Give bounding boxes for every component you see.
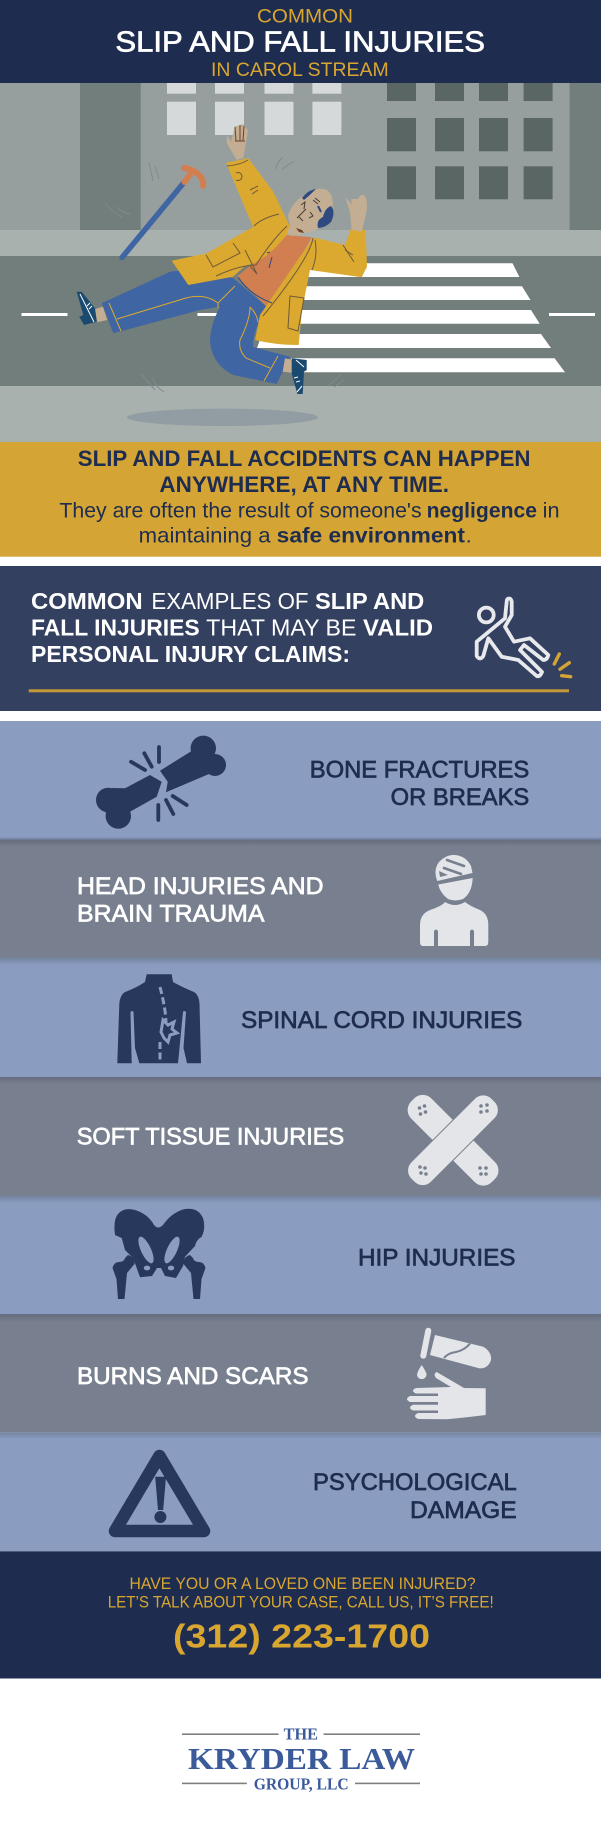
trouser seams <box>109 286 278 381</box>
band body text: in <box>543 499 560 522</box>
road and sidewalks <box>0 230 601 442</box>
shoe laces <box>80 294 304 392</box>
gold message band <box>0 442 601 557</box>
buildings background <box>0 83 601 230</box>
band heading: SLIP AND FALL ACCIDENTS CAN HAPPEN <box>78 446 531 471</box>
icon: head bandage <box>420 855 488 946</box>
label: BRAIN TRAUMA <box>77 901 264 928</box>
law firm logo: KRYDER LAW <box>188 1741 415 1776</box>
band body text: safe environment <box>277 524 465 547</box>
call to action footer <box>0 1551 601 1678</box>
row: bone fractures <box>0 721 601 840</box>
label: HIP INJURIES <box>358 1245 516 1272</box>
label: PSYCHOLOGICAL <box>313 1469 517 1496</box>
panel heading <box>31 588 433 667</box>
header kicker: COMMON <box>257 6 353 28</box>
raised hand <box>227 124 248 160</box>
label: SOFT TISSUE INJURIES <box>77 1124 344 1151</box>
gold rule <box>29 689 569 692</box>
icon: chemical burn <box>407 1331 491 1419</box>
street scene illustration <box>0 83 601 442</box>
main title: SLIP AND FALL INJURIES <box>115 27 485 59</box>
panel heading: PERSONAL INJURY CLAIMS: <box>31 641 350 667</box>
row: head injuries <box>0 840 601 958</box>
panel heading: VALID <box>363 615 433 641</box>
panel heading: COMMON <box>31 588 143 614</box>
jacket seams <box>206 160 354 331</box>
ground shadow <box>127 409 318 426</box>
header location: IN CAROL STREAM <box>211 59 389 81</box>
label: HEAD INJURIES AND <box>77 873 324 900</box>
icon: broken bone <box>96 736 226 829</box>
row: soft tissue injuries <box>0 1077 601 1196</box>
icon: spine torso <box>117 974 201 1063</box>
band body text: . <box>466 524 472 547</box>
band heading <box>78 446 531 497</box>
face lines <box>297 198 321 221</box>
call to action text: HAVE YOU OR A LOVED ONE BEEN INJURED? <box>130 1574 476 1593</box>
panel heading: FALL INJURIES <box>31 615 200 641</box>
band body text <box>59 499 560 547</box>
shoes <box>77 292 97 325</box>
label: BONE FRACTURES <box>310 757 529 784</box>
lane dashes <box>22 313 595 316</box>
row: burns and scars <box>0 1314 601 1432</box>
panel heading: THAT MAY BE <box>206 615 356 641</box>
band body text: maintaining a <box>139 524 271 547</box>
motion lines <box>105 157 344 392</box>
band body text: negligence <box>427 499 537 522</box>
label <box>310 757 529 811</box>
label: OR BREAKS <box>391 784 529 811</box>
law firm logo <box>182 1724 420 1794</box>
label: BURNS AND SCARS <box>77 1363 308 1390</box>
panel heading: SLIP AND <box>315 588 424 614</box>
row: spinal cord injuries <box>0 958 601 1077</box>
icon: pelvis <box>112 1209 206 1299</box>
falling man <box>77 124 367 394</box>
jacket <box>172 158 290 285</box>
navy intro panel <box>0 566 601 711</box>
law firm logo: GROUP, LLC <box>254 1775 349 1794</box>
head <box>288 189 333 232</box>
icon: warning triangle <box>115 1456 204 1531</box>
panel heading: EXAMPLES OF <box>151 588 309 614</box>
row: psychological damage <box>0 1432 601 1551</box>
icon: falling person <box>477 598 571 677</box>
icon: crossed bandages <box>403 1090 503 1191</box>
band body text: They are often the result of someone's <box>59 499 422 522</box>
header banner <box>0 0 601 83</box>
phone number: (312) 223-1700 <box>173 1618 430 1655</box>
left hand <box>345 195 367 232</box>
shirt <box>237 235 312 310</box>
ankles <box>95 307 107 322</box>
call to action text: LET’S TALK ABOUT YOUR CASE, CALL US, IT’S FREE! <box>108 1593 494 1612</box>
label <box>77 873 324 928</box>
label <box>313 1469 517 1524</box>
label: SPINAL CORD INJURIES <box>241 1007 522 1034</box>
band heading: ANYWHERE, AT ANY TIME. <box>159 472 449 497</box>
label: DAMAGE <box>410 1497 517 1524</box>
crosswalk <box>257 263 565 372</box>
row: hip injuries <box>0 1196 601 1314</box>
law firm logo: THE <box>284 1724 318 1743</box>
call to action text <box>108 1574 494 1612</box>
cane <box>122 168 203 258</box>
trousers <box>102 271 290 384</box>
